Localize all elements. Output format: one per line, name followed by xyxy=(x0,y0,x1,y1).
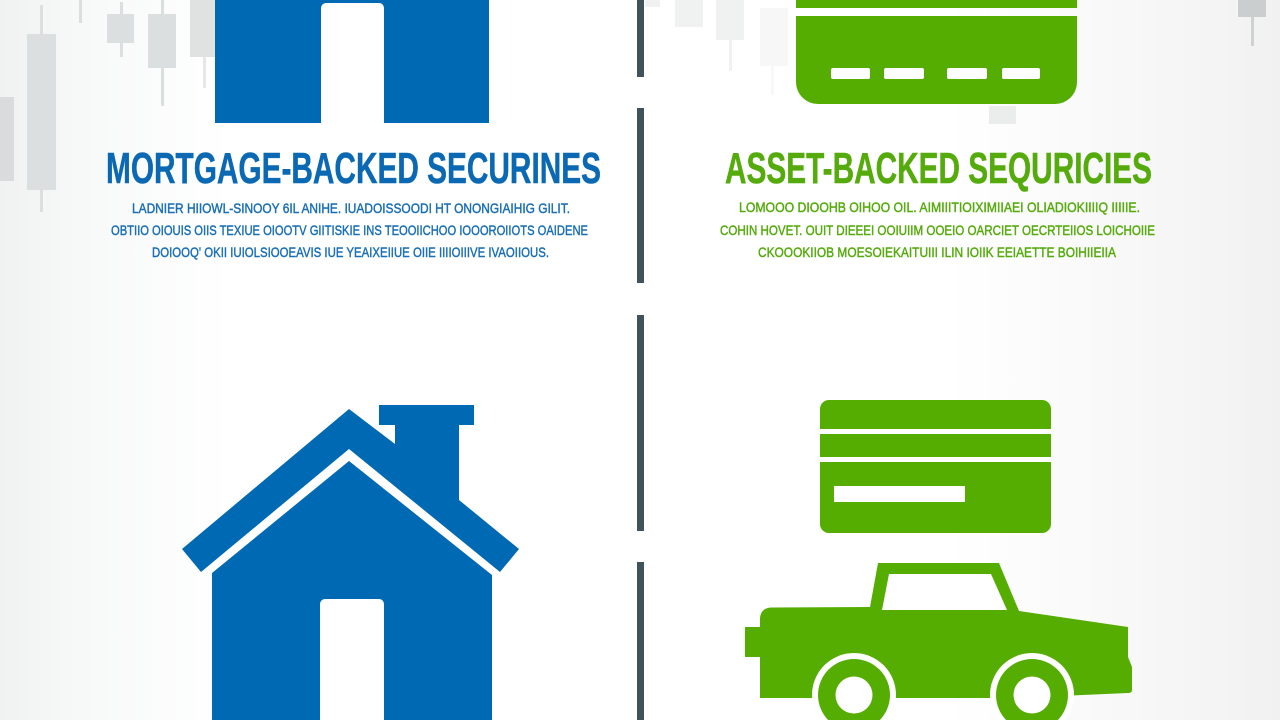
panel: asset-backed securities xyxy=(720,0,1155,720)
icon: cropped house base xyxy=(215,0,489,123)
text block: mortgage description: LADNIER HIIOWL-SINOOY 6IL ANIHE. IUADOISSOODI HT ONONGIAIHIG GILIT. xyxy=(132,200,570,216)
text block: mortgage description: OBTIIO OIOUIS OIIS TEXIUE OIOOTV GIITISKIE INS TEOOIICHOO IOOOROIIOTS OAIDENE xyxy=(111,222,588,238)
icon: house xyxy=(182,405,519,720)
text block: mortgage description xyxy=(111,200,588,260)
center divider xyxy=(637,0,644,720)
icon: credit card xyxy=(820,400,1051,533)
heading: mortgage-backed securities: MORTGAGE-BACKED SECURINES xyxy=(106,144,601,193)
text block: asset description xyxy=(720,199,1155,260)
candlestick chart: right background xyxy=(645,0,1266,124)
panel: mortgage-backed securities xyxy=(106,0,601,720)
text block: asset description: COHIN HOVET. OUIT DIEEEI OOIUIIM OOEIO OARCIET OECRTEIIOS LOICHOIIE xyxy=(720,222,1155,238)
icon: car xyxy=(745,563,1132,720)
text block: mortgage description: DOIOOQ' OKII IUIOLSIOOEAVIS IUE YEAIXEIIUE OIIE IIIIOIIIVE IVAOIIOUS. xyxy=(152,244,549,260)
candlestick chart: left background xyxy=(0,0,215,212)
text block: asset description: CKOOOKIIOB MOESOIEKAITUIII ILIN IOIIK EEIAETTE BOIHIIEIIA xyxy=(758,244,1117,260)
icon: cropped credit card xyxy=(796,0,1077,104)
text block: asset description: LOMOOO DIOOHB OIHOO OIL. AIMIIITIOIXIMIIAEI OLIADIOKIIIIQ IIIIIE. xyxy=(739,199,1140,215)
